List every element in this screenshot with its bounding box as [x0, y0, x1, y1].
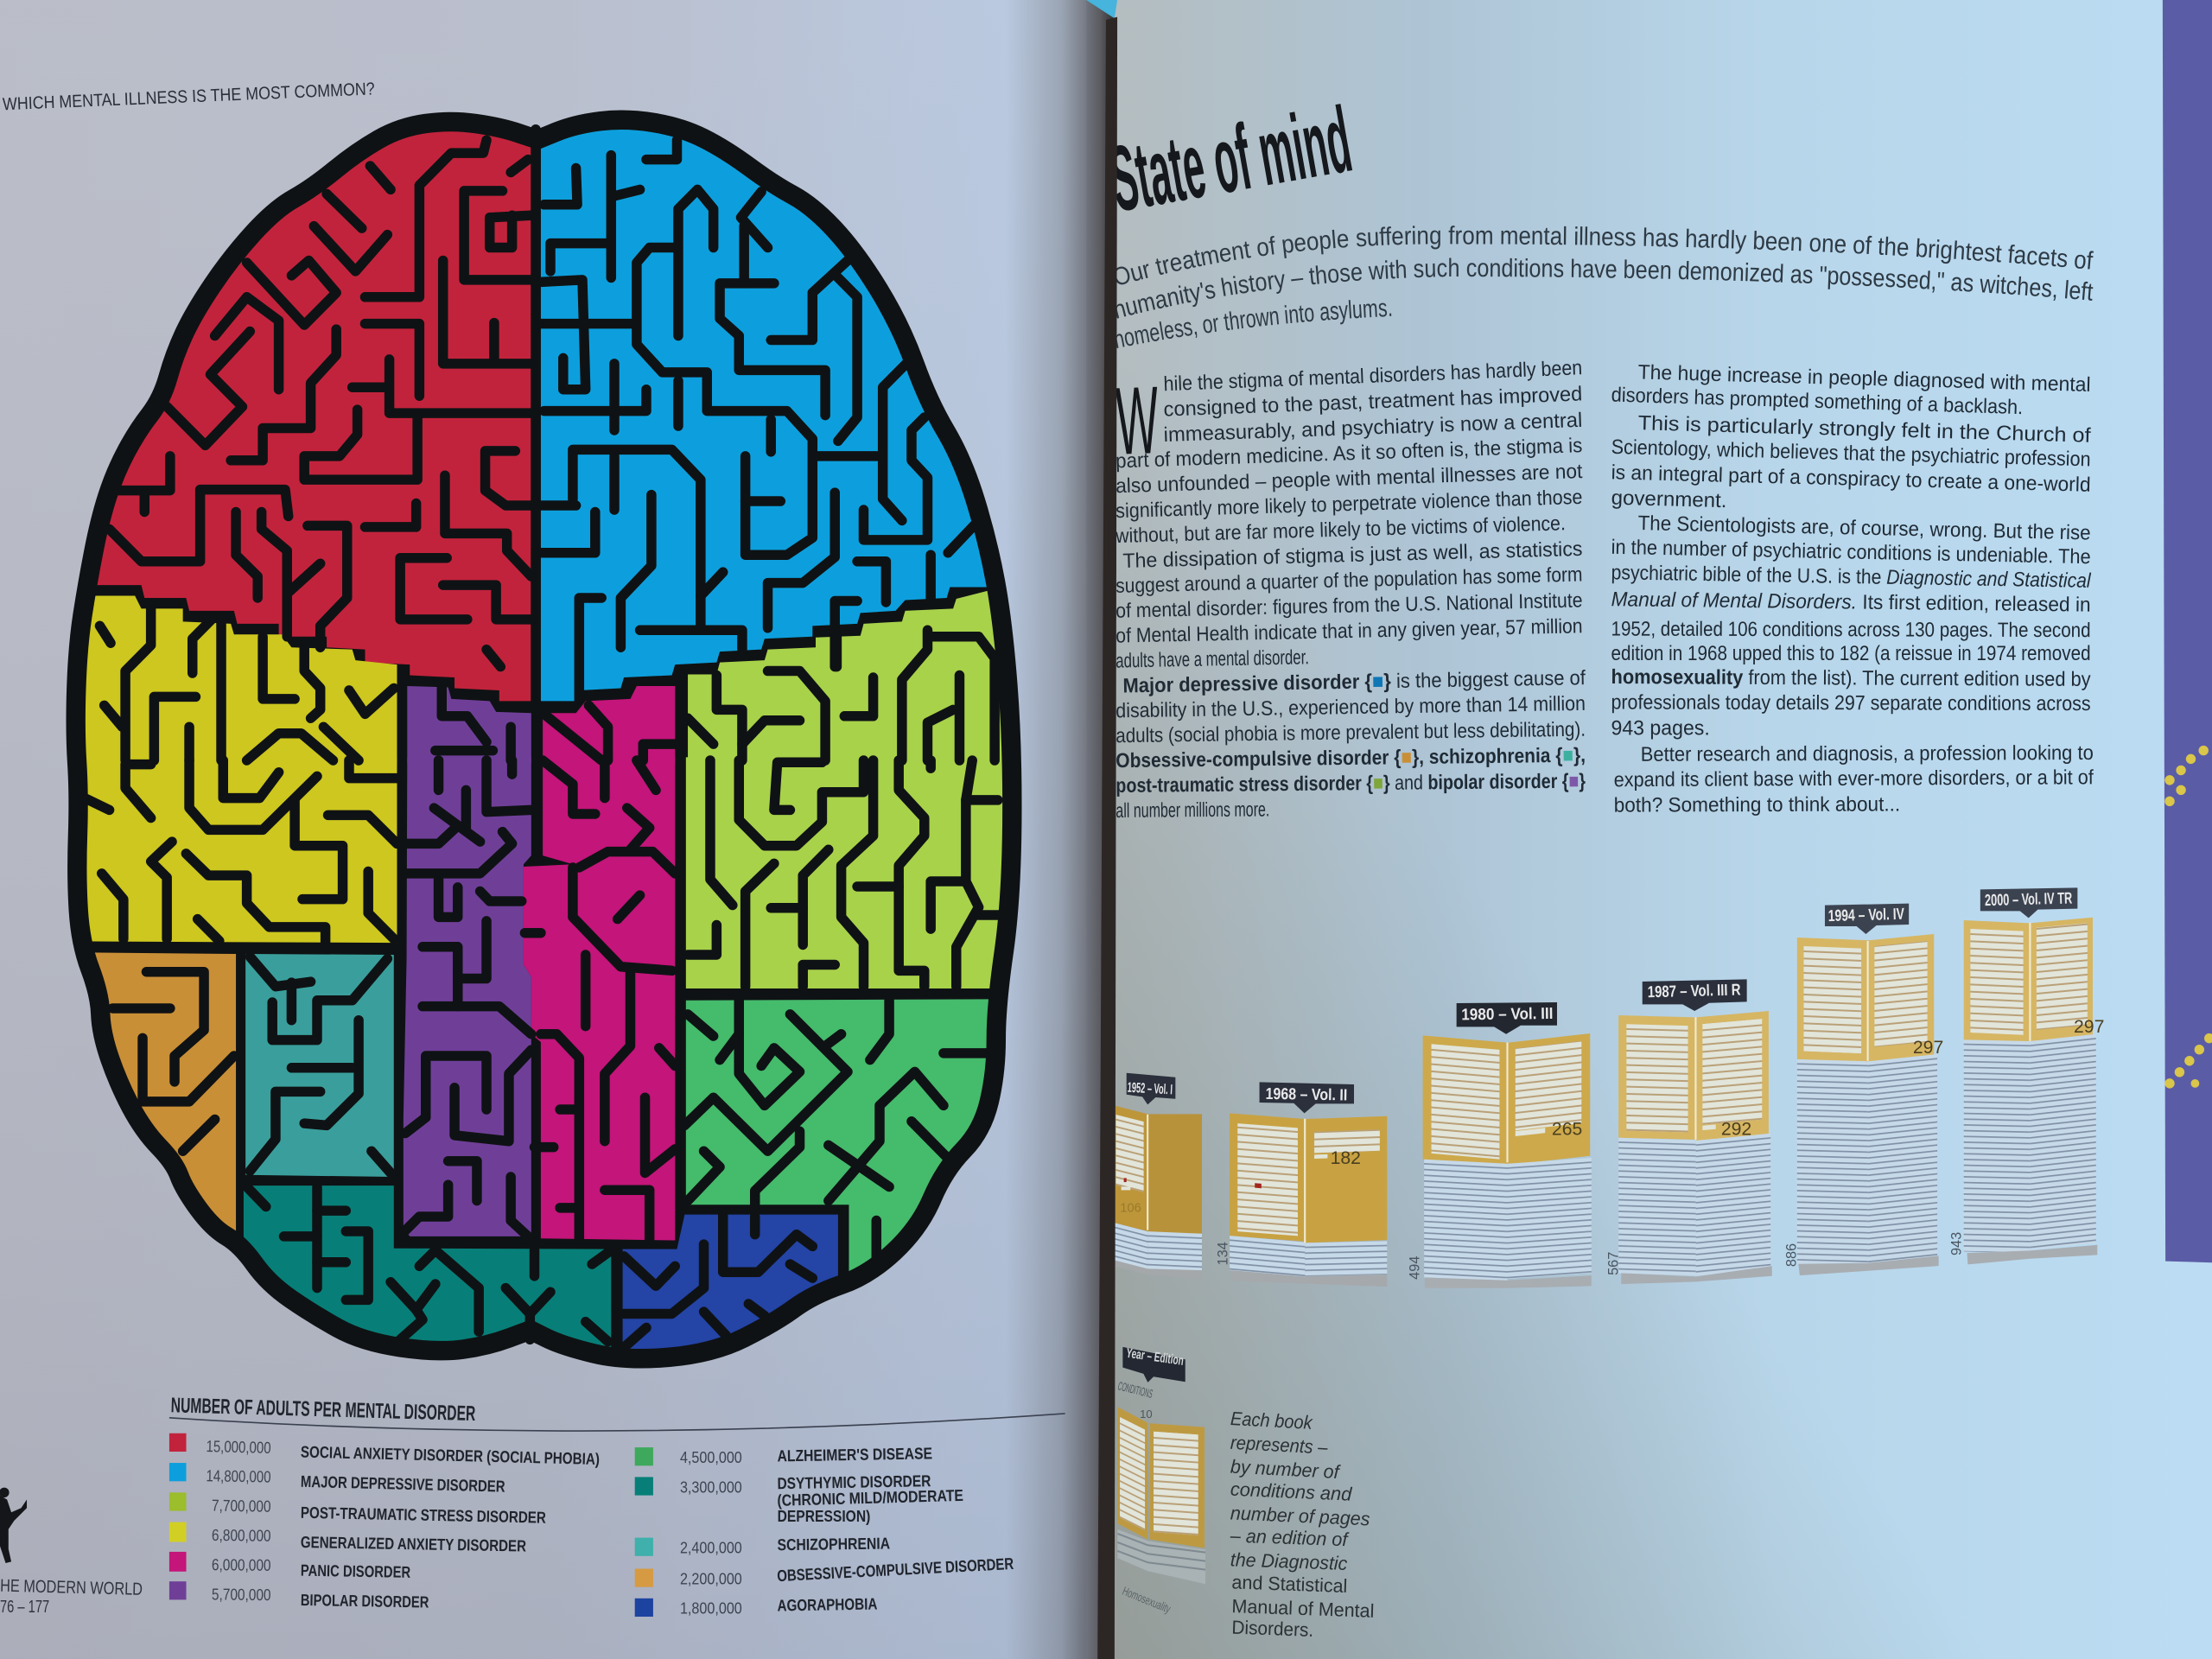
body text column 1: The dissipation of stigma is just as well, as statistics	[1122, 538, 1583, 573]
body text column 1: W	[1115, 365, 1160, 475]
next page edge: purple strip with dots	[2163, 0, 2212, 1262]
body text column 2: Scientology, which believes that the psychiatric profession	[1611, 436, 2091, 471]
condition counts: 292	[1721, 1119, 1751, 1139]
legend column 2: (CHRONIC MILD/MODERATE	[777, 1486, 963, 1510]
body text column 2: expand its client base with ever-more disorders, or a bit of	[1614, 766, 2094, 791]
body text column 2: Manual of Mental Disorders. Its first edition, released in	[1611, 588, 2091, 617]
legend column 2: ALZHEIMER'S DISEASE	[777, 1444, 932, 1465]
edition labels: 2000 – Vol. IV TR	[1985, 889, 2073, 909]
page counts	[1215, 1232, 1964, 1280]
book 1952	[1114, 1073, 1202, 1279]
legend column 1: 15,000,000	[206, 1437, 271, 1457]
body text column 2: 943 pages.	[1611, 718, 1710, 741]
icon: silhouette figure	[0, 1488, 27, 1563]
body text column 2: both? Something to think about...	[1614, 793, 1900, 817]
condition counts: 106	[1120, 1201, 1141, 1215]
condition counts: 297	[2074, 1017, 2104, 1037]
key explanation text	[1230, 1408, 1375, 1641]
chart: DSM editions as books	[1114, 887, 2104, 1288]
body text column 1: part of modern medicine. As it so often is, the stigma is	[1116, 435, 1583, 473]
key explanation text: Each book	[1230, 1408, 1313, 1433]
body text column 1: Obsessive-compulsive disorder {■}, schizophrenia {■},	[1116, 745, 1586, 772]
body text column 1: suggest around a quarter of the population has some form	[1116, 563, 1583, 598]
lede paragraph: homeless, or thrown into asylums.	[1116, 300, 1391, 348]
maze lines upper	[99, 130, 995, 760]
body text column 2: edition in 1968 upped this to 182 (a reissue in 1974 removed	[1611, 643, 2091, 665]
key: sample book	[1116, 1346, 1205, 1616]
page counts: 943	[1948, 1232, 1964, 1255]
body text column 2: professionals today details 297 separate conditions across	[1611, 691, 2091, 715]
key: sample book: CONDITIONS	[1116, 1379, 1154, 1401]
legend column 2	[635, 1444, 1014, 1618]
body text column 1: consigned to the past, treatment has improved	[1163, 383, 1583, 422]
legend: number of adults per mental disorder	[169, 1394, 1065, 1618]
condition counts: 182	[1331, 1148, 1361, 1168]
edition labels: 1987 – Vol. III R	[1647, 980, 1741, 1001]
legend column 1: BIPOLAR DISORDER	[301, 1591, 429, 1611]
heading: question: WHICH MENTAL ILLNESS IS THE MOST COMMON?	[3, 79, 375, 114]
edition labels: 1980 – Vol. III	[1461, 1004, 1554, 1023]
body text column 1: immeasurably, and psychiatry is now a central	[1163, 410, 1583, 447]
legend column 2: 4,500,000	[680, 1448, 742, 1466]
body text column 1: hile the stigma of mental disorders has hardly been	[1163, 357, 1583, 396]
brain outline band	[76, 120, 1012, 1358]
key explanation text: number of pages	[1230, 1502, 1370, 1529]
body text column 1: adults (social phobia is more prevalent but less debilitating).	[1116, 719, 1586, 747]
book 1987	[1618, 979, 1772, 1284]
key explanation text: Disorders.	[1231, 1617, 1314, 1641]
body text column 1: disability in the U.S., experienced by more than 14 million	[1116, 693, 1586, 722]
legend column 2: DSYTHYMIC DISORDER	[777, 1471, 931, 1492]
maze lines lower	[80, 760, 1004, 1347]
brain clipped regions and maze	[85, 130, 1002, 1349]
body text column 1: of mental disorder: figures from the U.S. National Institute	[1116, 589, 1583, 623]
legend column 1: 14,800,000	[206, 1466, 271, 1486]
body text column 1: of Mental Health indicate that in any given year, 57 million	[1116, 615, 1583, 648]
book 1968	[1230, 1082, 1387, 1287]
page counts: 886	[1783, 1243, 1799, 1267]
legend column 1: MAJOR DEPRESSIVE DISORDER	[301, 1472, 505, 1496]
legend column 2: 1,800,000	[680, 1599, 742, 1618]
body text column 2: psychiatric bible of the U.S. is the Diagnostic and Statistical	[1611, 562, 2092, 593]
key explanation text: the Diagnostic	[1230, 1548, 1348, 1574]
legend column 2: 2,200,000	[680, 1569, 742, 1587]
key tick value: 10	[1140, 1408, 1153, 1421]
body text column 2: disorders has prompted something of a backlash.	[1611, 384, 2024, 419]
lede paragraph: Our treatment of people suffering from mental illness has hardly been one of the brightest facets of	[1116, 226, 2094, 285]
body text column 1: also unfounded – people with mental illnesses are not	[1116, 461, 1583, 498]
section name and page numbers: 76 – 177	[0, 1598, 49, 1617]
key explanation text: and Statistical	[1231, 1571, 1348, 1597]
body text column 1	[1115, 357, 1586, 823]
page counts: 134	[1215, 1242, 1230, 1265]
key explanation text: by number of	[1230, 1456, 1342, 1483]
text: State of mind	[1103, 86, 1358, 232]
edition labels	[1127, 889, 2073, 1103]
condition counts: 297	[1913, 1038, 1943, 1058]
edition labels: 1952 – Vol. I	[1127, 1080, 1173, 1097]
legend column 1: 7,700,000	[212, 1497, 271, 1516]
legend column 2: 3,300,000	[680, 1478, 742, 1496]
book drawings	[1114, 887, 2097, 1288]
body text column 2: is an integral part of a conspiracy to create a one-world	[1611, 461, 2091, 497]
body text column 2	[1611, 361, 2094, 817]
lede paragraph: humanity's history – those with such conditions have been demonized as "possessed," as witches, left	[1116, 257, 2093, 319]
edition labels: 1994 – Vol. IV	[1827, 905, 1905, 925]
body text column 1: all number millions more.	[1116, 798, 1269, 823]
key explanation text: conditions and	[1230, 1478, 1353, 1505]
legend column 2: 2,400,000	[680, 1539, 742, 1557]
legend column 1: POST-TRAUMATIC STRESS DISORDER	[301, 1503, 546, 1527]
page counts: 567	[1606, 1252, 1622, 1275]
legend column 1: 6,000,000	[212, 1555, 271, 1574]
condition counts	[1120, 1017, 2104, 1215]
top gutter sliver	[1086, 0, 1117, 18]
page counts: 494	[1407, 1256, 1422, 1280]
body text column 1: significantly more likely to perpetrate violence than those	[1116, 486, 1583, 523]
legend column 1: SOCIAL ANXIETY DISORDER (SOCIAL PHOBIA)	[301, 1443, 600, 1468]
body text column 1: without, but are far more likely to be victims of violence.	[1115, 512, 1566, 548]
legend column 1: 6,800,000	[212, 1526, 271, 1545]
key explanation text: Manual of Mental	[1231, 1595, 1375, 1622]
key label text: Year – Edition	[1125, 1346, 1185, 1369]
body text column 1: adults have a mental disorder.	[1116, 646, 1309, 673]
edition labels: 1968 – Vol. II	[1265, 1084, 1347, 1103]
legend title: NUMBER OF ADULTS PER MENTAL DISORDER	[170, 1394, 476, 1426]
section name and page numbers: HE MODERN WORLD	[0, 1577, 143, 1599]
key label	[1122, 1347, 1185, 1382]
body text column 2: This is particularly strongly felt in the Church of	[1637, 412, 2091, 448]
brain upper half	[85, 130, 1002, 764]
body text column 2: 1952, detailed 106 conditions across 130 pages. The second	[1611, 619, 2091, 642]
lede paragraph	[1116, 226, 2094, 348]
gutter shadow	[1097, 17, 1117, 1659]
body text column 2: government.	[1611, 487, 1727, 512]
body text column 2: The Scientologists are, of course, wrong. But the rise	[1637, 512, 2091, 544]
body text column 2: in the number of psychiatric conditions is undeniable. The	[1611, 537, 2091, 569]
legend column 1: 5,700,000	[212, 1585, 271, 1604]
section name and page numbers	[0, 1577, 143, 1617]
book 1994	[1797, 904, 1939, 1275]
book 1980	[1423, 1002, 1592, 1288]
book spines	[1147, 923, 2030, 1243]
legend column 1: PANIC DISORDER	[301, 1561, 411, 1581]
key homosexuality marker: Homosexuality	[1121, 1584, 1173, 1616]
body text column 1: post-traumatic stress disorder {■} and bipolar disorder {■}	[1116, 771, 1586, 798]
legend column 2: SCHIZOPHRENIA	[777, 1534, 891, 1554]
legend column 1	[169, 1433, 600, 1611]
left page background	[0, 0, 1117, 1659]
body text column 2: The huge increase in people diagnosed with mental	[1637, 361, 2091, 397]
brain maze chart	[66, 111, 1021, 1369]
body text column 1: Major depressive disorder {■} is the biggest cause of	[1122, 667, 1586, 697]
brain lower half	[86, 757, 1002, 1349]
legend column 2: OBSESSIVE-COMPULSIVE DISORDER	[777, 1554, 1014, 1585]
body text column 2: homosexuality from the list). The current edition used by	[1611, 666, 2091, 691]
right page background	[1115, 0, 2212, 1659]
key explanation text: – an edition of	[1230, 1524, 1351, 1550]
body text column 2: Better research and diagnosis, a profession looking to	[1641, 742, 2094, 766]
legend column 1: GENERALIZED ANXIETY DISORDER	[301, 1533, 527, 1555]
legend column 2: DEPRESSION)	[778, 1507, 870, 1525]
book 2000	[1964, 887, 2097, 1264]
condition counts: 265	[1552, 1119, 1582, 1139]
key explanation text: represents –	[1230, 1432, 1329, 1459]
legend column 2: AGORAPHOBIA	[777, 1594, 878, 1614]
